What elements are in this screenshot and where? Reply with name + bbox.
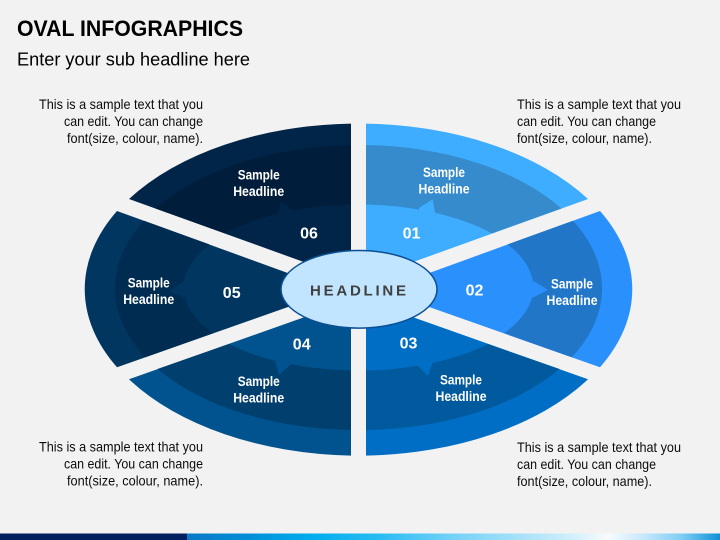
segment 04 number: 04	[293, 336, 311, 354]
segment 05 dark band	[115, 221, 213, 357]
panel: segment 06	[129, 124, 351, 279]
panel: segment 04	[129, 301, 351, 456]
panel: segment 03	[366, 301, 588, 456]
panel: segment 01	[366, 124, 588, 279]
segment 06 number: 06	[300, 226, 318, 242]
segment 06 label	[233, 168, 284, 199]
segment 06 dark band	[156, 145, 351, 233]
segment 03 label: Headline	[436, 389, 486, 404]
segment 02 label	[546, 276, 598, 308]
segment 04 outer shape	[129, 301, 351, 456]
segment 02 outer shape	[400, 211, 632, 367]
text block: top right: font(size, colour, name).	[517, 131, 652, 146]
segment 01 arrow	[419, 199, 435, 225]
segment 01 dark band	[366, 145, 562, 233]
segment 01 number: 01	[403, 226, 420, 242]
segment 05 arrow	[170, 280, 192, 298]
footer gradient bar	[0, 534, 720, 540]
segment 03 outer shape	[366, 301, 588, 456]
center headline: HEADLINE	[310, 282, 406, 300]
segment 03 arrow	[415, 352, 433, 376]
text block: top left	[39, 97, 203, 146]
text block: bottom left	[39, 440, 203, 488]
text block: top right	[517, 97, 681, 146]
segment 03 number: 03	[400, 336, 418, 352]
subtitle: Enter your sub headline here	[17, 48, 250, 70]
segment 01 label	[418, 165, 470, 196]
segment 02 arrow	[525, 281, 548, 298]
segment 04 label	[233, 374, 284, 406]
segment 06 outer shape	[129, 124, 351, 279]
center oval	[281, 250, 437, 328]
panel: segment 05	[85, 211, 317, 367]
segment 06 arrow	[278, 202, 295, 225]
segment 03 dark band	[366, 344, 560, 430]
segment 04 arrow	[275, 350, 292, 375]
text block: bottom right: can edit. You can change	[517, 457, 656, 472]
text block: top left: font(size, colour, name).	[67, 131, 203, 146]
segment 06 label: Headline	[233, 184, 284, 199]
text block: bottom left: can edit. You can change	[64, 456, 203, 472]
segment 05 outer shape	[85, 211, 317, 367]
segment 02 label: Headline	[546, 293, 598, 308]
text block: top right: This is a sample text that you	[517, 97, 681, 112]
segment 04 label: Headline	[233, 390, 284, 406]
text block: bottom right: font(size, colour, name).	[517, 474, 652, 489]
text block: bottom right: This is a sample text that you	[517, 440, 681, 455]
segment 01 label: Headline	[418, 182, 470, 196]
segment 02 number: 02	[466, 282, 484, 300]
text block: top right: can edit. You can change	[517, 114, 656, 129]
segment 01 label: Sample	[423, 165, 465, 180]
segment 06 label: Sample	[238, 168, 280, 182]
segment 04 dark band	[158, 344, 351, 430]
text block: bottom right	[517, 440, 681, 489]
segment 05 label	[123, 276, 174, 307]
segment 01 outer shape	[366, 124, 588, 279]
title: OVAL INFOGRAPHICS	[17, 16, 243, 41]
segment 05 label: Sample	[128, 276, 170, 290]
segment 03 label: Sample	[440, 372, 482, 388]
segment 02 label: Sample	[551, 276, 593, 292]
text block: bottom left: font(size, colour, name).	[67, 474, 203, 488]
text block: top left: can edit. You can change	[64, 114, 203, 129]
segment 02 dark band	[504, 221, 602, 357]
text block: top left: This is a sample text that you	[39, 97, 203, 112]
segment 05 label: Headline	[123, 292, 174, 307]
segment 04 label: Sample	[238, 374, 280, 389]
panel: segment 02	[400, 211, 632, 367]
segment 03 label	[436, 372, 486, 404]
text block: bottom left: This is a sample text that you	[39, 440, 203, 454]
segment 05 number: 05	[223, 285, 241, 302]
